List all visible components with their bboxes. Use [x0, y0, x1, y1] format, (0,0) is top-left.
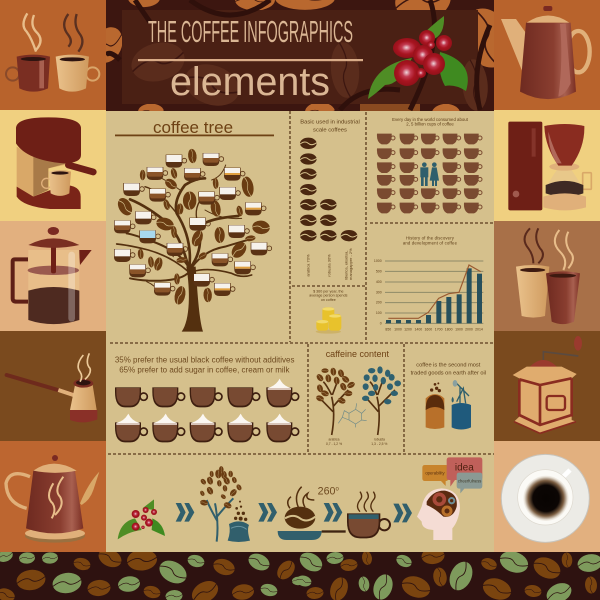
panel: daily consumption cups [377, 117, 482, 213]
chart: history of coffee: and development of coffee [403, 241, 458, 246]
panel: daily consumption cups: 2, 5 billion cups of coffee [406, 122, 454, 127]
chart: bean pictogram of coffee varieties: robusta 30% [326, 254, 331, 277]
icon: caffeine molecule [338, 403, 367, 427]
chart: history of coffee: 200 [376, 301, 382, 305]
panel: coffee preference cups [115, 356, 299, 442]
chart: history of coffee: 1000 [394, 328, 402, 332]
callout: operability: operability [425, 471, 445, 477]
chart: history of coffee: 0 [380, 321, 382, 325]
chart: bean pictogram of coffee varieties: liberica, eksélsa, [343, 251, 348, 280]
text and icon: spending per year with coins: $ 360 per year, the [313, 289, 344, 293]
panel: bottom bean band [0, 552, 600, 600]
arrow [258, 503, 277, 522]
chart: history of coffee: 1700 [435, 328, 443, 332]
icon: coffee pot [501, 6, 590, 99]
chart: history of coffee: 300 [376, 290, 382, 294]
panel: daily consumption cups: Every day in the world consumed about [392, 117, 468, 122]
icon: roasting bean in pan [278, 487, 346, 540]
header panel [106, 0, 494, 111]
chart: history of coffee: 1000 [374, 259, 382, 263]
chart: history of coffee: 1400 [414, 328, 422, 332]
icon: arabica tree [315, 367, 356, 435]
icon: top view cup on saucer [501, 454, 589, 542]
icon: espresso machine [16, 117, 93, 209]
panel: caffeine content [315, 349, 401, 446]
callout: cheerfulness: cheerfulness [458, 478, 482, 483]
chart: history of coffee: 1600 [424, 328, 432, 332]
chart: history of coffee: History of the discovery [406, 236, 454, 241]
heading: coffee tree: coffee tree [153, 118, 233, 137]
chart: history of coffee: 500 [376, 269, 382, 273]
panel: second most traded goods: traded goods on earth after oil [411, 370, 486, 376]
icon: man and woman [420, 162, 439, 186]
icon: cup with steam [347, 492, 390, 538]
callout: idea [447, 457, 482, 487]
panel: coffee preference cups: 35% prefer the usual black coffee without additives [115, 356, 294, 365]
icon: french press [13, 227, 92, 324]
panel: second most traded goods: coffee is the second most [416, 363, 481, 369]
panel: second most traded goods [411, 363, 486, 429]
icon: berries [118, 499, 165, 539]
icon: coffee berries and leaves [368, 16, 468, 99]
panel: coffee preference cups: 65% prefer to add sugar in coffee, cream or milk [119, 365, 289, 374]
icon: coffee tree [199, 466, 243, 542]
callout: idea: idea [455, 463, 474, 474]
panel: coffee process [118, 457, 482, 542]
icon: paper cups [516, 228, 580, 324]
chart: history of coffee: 1200 [404, 328, 412, 332]
icon: teapot [6, 455, 99, 543]
icon: drip coffee maker [508, 122, 591, 210]
icon: robusta tree [362, 366, 401, 435]
panel: left column backgrounds [0, 0, 106, 552]
callout: cheerfulness [457, 473, 482, 493]
callout: operability [422, 465, 448, 486]
subtitle: elements [170, 60, 330, 104]
arrow [176, 503, 194, 522]
icon: sack of beans [228, 501, 250, 542]
chart: history of coffee: 400 [376, 280, 382, 284]
icon: two cups with steam [6, 13, 99, 92]
text: roasting temperature: o [335, 486, 339, 492]
chart: history of coffee: 2014 [475, 328, 483, 332]
arrow [393, 504, 412, 522]
text and icon: spending per year with coins: on coffee [321, 298, 336, 302]
panel: caffeine content: robusta [374, 438, 385, 442]
text and icon: spending per year with coins: average person spends [309, 294, 348, 298]
icon: coffee sack [426, 382, 444, 429]
icon: head with gears [417, 488, 460, 540]
chart: history of coffee: 100 [376, 311, 382, 315]
icon: coffee grinder [513, 336, 582, 433]
chart: history of coffee: 850 [385, 328, 391, 332]
chart: bean pictogram of coffee varieties [300, 120, 360, 280]
panel: caffeine content: caffeine content [326, 349, 389, 359]
title rule [138, 59, 363, 61]
chart: history of coffee: 2000 [465, 328, 473, 332]
text: industrial coffees heading: scale coffees [313, 128, 347, 134]
chart: history of coffee: 1800 [445, 328, 453, 332]
panel: right column backgrounds [494, 0, 600, 552]
chart: history of coffee [374, 236, 483, 332]
chart: history of coffee: 1900 [455, 328, 463, 332]
text: roasting temperature: 260 [318, 485, 335, 497]
header panel: THE COFFEE INFOGRAPHICS [148, 14, 353, 49]
panel: caffeine content: arabica [329, 438, 339, 442]
panel: dashed dividers [108, 111, 494, 454]
arrow [324, 503, 342, 522]
chart: coffee tree [114, 148, 272, 332]
icon: oil barrel and pump [451, 380, 471, 429]
text and icon: spending per year with coins [309, 289, 348, 334]
chart: bean pictogram of coffee varieties: managapper - 2% [348, 248, 353, 280]
text: industrial coffees heading: Basic used in industrial [300, 120, 360, 126]
panel: caffeine content: 0,7 - 1,2 % [326, 442, 342, 446]
panel: caffeine content: 1,3 - 2,5 % [371, 442, 387, 446]
icon: cezve [7, 353, 97, 422]
chart: bean pictogram of coffee varieties: arabica 70% [305, 254, 310, 277]
